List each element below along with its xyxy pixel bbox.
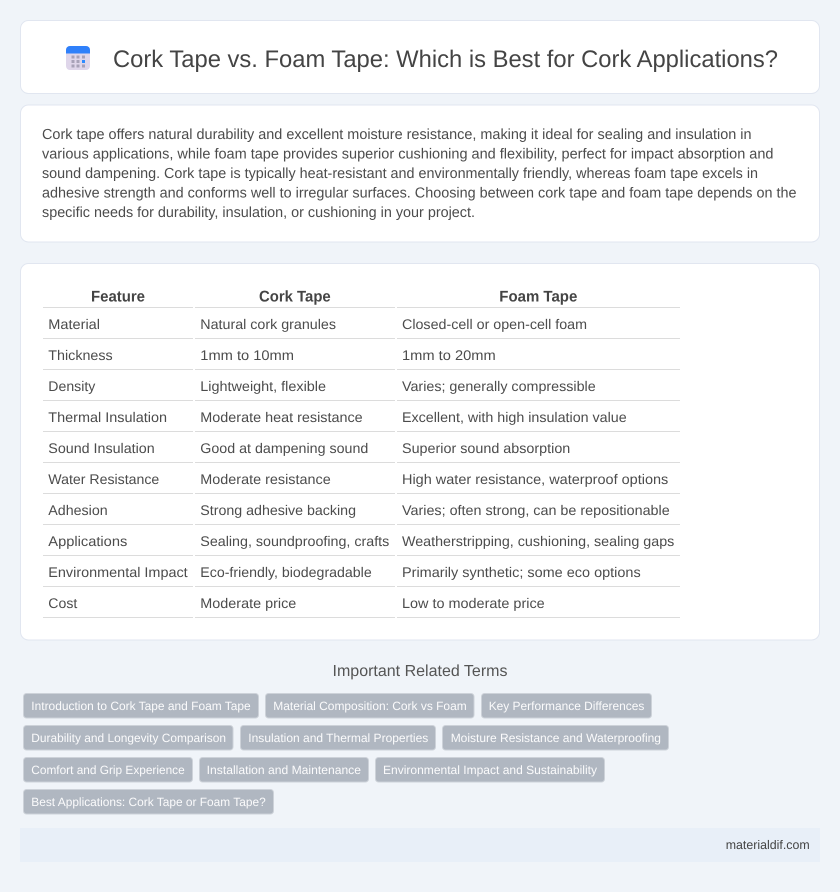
row: material — [48, 316, 587, 332]
tag: moisture: Moisture Resistance and Waterproofing — [451, 731, 661, 745]
heading: related terms: Important Related Terms — [332, 663, 508, 680]
row: water resistance: Water Resistance — [48, 471, 160, 487]
row: thermal insulation — [48, 409, 627, 425]
row: water resistance — [48, 471, 668, 487]
row: sound insulation: Good at dampening sound — [200, 440, 368, 456]
row: density — [48, 378, 596, 394]
tag: key performance: Key Performance Differences — [489, 699, 644, 713]
tag: best applications: Best Applications: Cork Tape or Foam Tape? — [31, 795, 266, 809]
tag: durability: Durability and Longevity Comparison — [31, 731, 226, 745]
tag: comfort: Comfort and Grip Experience — [31, 763, 185, 777]
icon: calendar — [66, 46, 90, 70]
row: applications: Applications — [48, 533, 127, 549]
tag: insulation — [240, 726, 436, 750]
row: cost: Moderate price — [200, 595, 297, 611]
row: thermal insulation: Excellent, with high insulation value — [402, 409, 627, 425]
row: environmental impact: Eco-friendly, biodegradable — [200, 564, 372, 580]
row: cost: Cost — [48, 595, 77, 611]
row: cost: Low to moderate price — [402, 595, 545, 611]
tag: environmental: Environmental Impact and Sustainability — [383, 763, 597, 777]
row: sound insulation: Superior sound absorption — [402, 440, 570, 456]
row: applications: Weatherstripping, cushioning, sealing gaps — [402, 533, 674, 549]
table header: Cork Tape — [259, 288, 331, 306]
row: environmental impact: Environmental Impact — [48, 564, 188, 580]
row: applications — [48, 533, 674, 549]
row: material: Closed-cell or open-cell foam — [402, 316, 587, 332]
row: environmental impact — [48, 564, 641, 580]
tag: introduction — [24, 694, 258, 718]
tag: moisture — [442, 726, 668, 750]
row: water resistance: High water resistance, waterproof options — [402, 471, 668, 487]
tag: key performance — [482, 694, 652, 718]
text block: summary: sound dampening. Cork tape is typically heat-resistant and environmentally friendly, whereas foam tape excels in — [42, 166, 758, 182]
row: adhesion: Strong adhesive backing — [200, 502, 356, 518]
title: Cork Tape vs. Foam Tape: Which is Best for Cork Applications? — [113, 46, 778, 73]
panel: intro paragraph — [20, 105, 820, 242]
panel: title header — [20, 20, 820, 94]
row: thermal insulation: Thermal Insulation — [48, 409, 167, 425]
row: thickness: Thickness — [48, 347, 113, 363]
tag: installation — [200, 758, 368, 782]
row: water resistance: Moderate resistance — [200, 471, 331, 487]
row: thickness: 1mm to 20mm — [402, 347, 496, 363]
text block: summary: specific needs for durability, insulation, or cushioning in your project. — [42, 205, 475, 221]
text block: summary — [42, 127, 796, 221]
row: adhesion: Varies; often strong, can be repositionable — [402, 502, 670, 518]
text block: summary: Cork tape offers natural durability and excellent moisture resistance, making it ideal for sealing and insulation in — [42, 127, 752, 143]
row: applications: Sealing, soundproofing, crafts — [200, 533, 389, 549]
table header: Foam Tape — [499, 288, 578, 306]
panel: comparison table — [20, 264, 820, 640]
row: sound insulation — [48, 440, 570, 456]
tag: installation: Installation and Maintenance — [207, 763, 361, 777]
row: thickness — [48, 347, 496, 363]
tag: best applications — [24, 790, 274, 814]
row: sound insulation: Sound Insulation — [48, 440, 155, 456]
table header — [91, 288, 578, 306]
row: thickness: 1mm to 10mm — [200, 347, 294, 363]
row: environmental impact: Primarily synthetic; some eco options — [402, 564, 641, 580]
text block: summary: adhesive strength and conforms well to irregular surfaces. Choosing between cork tape and foam tape depends on the — [42, 186, 796, 202]
row: cost — [48, 595, 545, 611]
row: thermal insulation: Moderate heat resistance — [200, 409, 363, 425]
text block: summary: various applications, while foam tape provides superior cushioning and flexibility, perfect for impact absorption and — [42, 146, 774, 162]
tag: introduction: Introduction to Cork Tape and Foam Tape — [31, 699, 251, 713]
tag: durability — [24, 726, 233, 750]
tag: environmental — [376, 758, 604, 782]
table header: Feature — [91, 288, 145, 306]
row: density: Varies; generally compressible — [402, 378, 596, 394]
row: material: Natural cork granules — [200, 316, 336, 332]
row: adhesion — [48, 502, 670, 518]
row: density: Density — [48, 378, 95, 394]
row: adhesion: Adhesion — [48, 502, 108, 518]
tag: comfort — [24, 758, 192, 782]
row: density: Lightweight, flexible — [200, 378, 326, 394]
panel: related term tags — [24, 694, 668, 814]
tag: material composition: Material Composition: Cork vs Foam — [273, 699, 467, 713]
footer source text: materialdif.com — [726, 838, 810, 852]
row: material: Material — [48, 316, 100, 332]
tag: insulation: Insulation and Thermal Properties — [248, 731, 428, 745]
tag: material composition — [266, 694, 474, 718]
footer — [20, 828, 820, 862]
